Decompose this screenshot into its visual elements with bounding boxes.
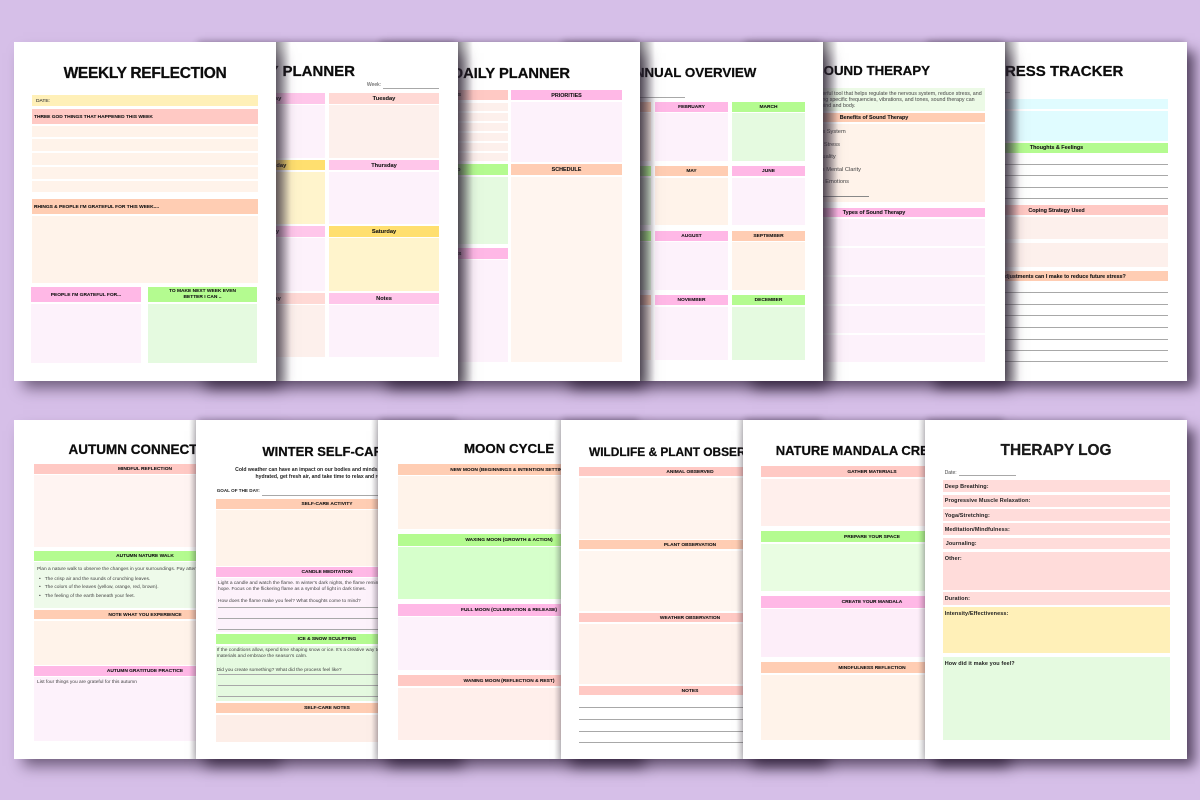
cyan panel [945,111,1168,141]
heading: weather observation: WEATHER OBSERVATION [660,616,720,621]
heading: september: SEPTEMBER [753,234,784,239]
field: intensity: Intensity/Effectiveness: [945,610,1009,616]
heading: may [655,166,728,176]
panel: gather materials [761,479,983,526]
heading: prepare your space [761,531,983,542]
heading: schedule: SCHEDULE [552,167,581,173]
field: yoga: Yoga/Stretching: [945,512,990,518]
panel: september [732,242,805,290]
heading: mindful reflection: MINDFUL REFLECTION [118,467,172,472]
ice text 1: If the conditions allow, spend time shaping snow or ice. It's a creative way to connect with natural [217,648,424,653]
heading: november: NOVEMBER [678,298,706,303]
heading: january [578,102,651,112]
field: other: Other: [945,556,962,562]
heading: notes: NOTES [682,689,698,694]
field: progressive muscle relaxation: Progressive Muscle Relaxation: [945,498,1031,504]
candle lines [218,607,378,630]
heading: april: APRIL [607,169,622,174]
heading: saturday: Saturday [372,229,396,235]
date field [32,95,258,106]
panel: december [732,307,805,360]
heading: monday: Monday [260,96,281,102]
heading: grateful things [32,199,258,214]
heading: february [655,102,728,112]
writing lines: adjustments [1005,292,1168,362]
panel: waxing moon [398,547,620,599]
heading: benefits: Benefits of Sound Therapy [840,115,908,121]
benefit 1: Calms the Nervous System [777,129,846,135]
heading: notes [579,686,801,695]
task row 2 [398,113,508,121]
heading: saturday [329,226,439,237]
heading: create your mandala [761,596,983,608]
heading: waxing moon: WAXING MOON (GROWTH & ACTION) [465,538,553,543]
benefit 2: Reduces Stress [800,142,840,148]
heading: new moon [398,464,620,475]
heading: next week [148,287,257,302]
heading: wednesday: Wednesday [255,163,286,169]
heading: thoughts: Thoughts & Feelings [1030,145,1083,151]
heading: mindfulness reflection: MINDFULNESS REFLECTION [838,666,906,671]
heading: next week: TO MAKE NEXT WEEK EVEN BETTER I CAN .. [169,288,236,300]
heading: nature walk [34,551,256,561]
type row 5 [763,335,985,362]
panel: friday [216,238,325,291]
heading: friday: Friday [262,229,279,235]
row 2 [32,139,258,150]
page: annual overview [560,37,840,400]
page: nature mandala creation [737,415,1018,778]
coping row 1 [945,217,1168,239]
field: journaling: Journaling: [946,541,977,547]
heading: sunday: Sunday [260,296,281,302]
heading: ice and snow: ICE & SNOW SCULPTING [298,637,356,642]
panel: weather observation [579,624,801,684]
benefit line [770,196,869,197]
intro panel [763,88,985,111]
field: journaling [943,538,1170,549]
panel: schedule [511,177,622,362]
heading: self-care notes [216,703,438,713]
heading: schedule [511,164,622,175]
panel: ice and snow [216,646,438,701]
heading: may: MAY [686,169,697,174]
panel: thursday [329,172,439,224]
title: AUTUMN CONNECTION [68,442,222,456]
panel: march [732,113,805,161]
heading: three good things: THREE GOD THINGS THAT HAPPENED THIS WEEK [34,115,153,120]
heading: full moon: FULL MOON (CULMINATION & RELEASE) [461,608,557,613]
field: deep breathing: Deep Breathing: [945,484,989,490]
heading: mindful reflection [34,464,256,474]
bullet list: • [39,585,41,590]
heading: plant observation [579,540,801,549]
row 5 [32,181,258,192]
page: winter self-care [190,415,470,778]
panel: june [732,178,805,225]
heading: waning moon: WANING MOON (REFLECTION & REST) [464,679,554,684]
panel: people [31,304,141,363]
heading: tuesday: Tuesday [373,96,395,102]
title: WILDLIFE & PLANT OBSERVATION [589,444,788,458]
ice question: Did you create something? What did the process feel like? [217,668,342,673]
bullet list: • [39,577,41,582]
task row 4 [398,133,508,141]
heading: adjustments [945,271,1168,281]
benefit 3: Improves Sleep Quality [777,154,836,160]
task row 6 [398,153,508,161]
panel: priorities [511,102,622,162]
panel: full moon [398,617,620,670]
heading: candle meditation: CANDLE MEDITATION [302,570,352,575]
panel: new moon [398,476,620,529]
panel: notes [398,260,508,362]
heading: notes: NOTES [445,252,461,257]
heading: note what you experience: NOTE WHAT YOU EXPERIENCE [108,613,182,618]
date line [947,92,1010,93]
bullet list: The feeling of the earth beneath your feet. [45,594,135,599]
panel: waning moon [398,688,620,740]
intro line 1: Cold weather can have an impact on our bodies and minds. Stay warm, stay [235,467,419,473]
title: MOON CYCLE [464,441,554,456]
panel: november [655,307,728,360]
heading: ice and snow [216,634,438,644]
row 3 [32,153,258,164]
walk text: Plan a nature walk to observe the changes in your surroundings. Pay attention to: [37,567,211,572]
panel: monday [216,105,325,158]
field: meditation: Meditation/Mindfulness: [945,527,1010,533]
field: intensity [943,607,1170,653]
heading: adjustments: What adjustments can I make to reduce future stress? [987,274,1126,280]
title: ANNUAL OVERVIEW [625,64,756,80]
panel: saturday [329,238,439,291]
heading: july [578,231,651,241]
title: WEEKLY PLANNER [216,62,355,80]
task row 3 [398,123,508,131]
row 4 [32,167,258,178]
heading: december [732,295,805,305]
candle text 1: Light a candle and watch the flame. In winter's dark nights, the flame reminds us of warmth and [218,581,422,586]
heading: priorities [511,90,622,100]
field: feeling [943,657,1170,740]
cyan bar [945,99,1168,109]
heading: prepare your space: PREPARE YOUR SPACE [844,535,900,540]
heading: weather observation [579,613,801,622]
title: NATURE MANDALA CREATION [776,442,968,458]
heading: people [31,287,141,302]
heading: june: JUNE [762,169,775,174]
heading: friday [216,226,325,237]
bullet list: • [39,594,41,599]
candle text 2: hope. Focus on the flickering flame as a symbol of light in dark times. [218,587,366,592]
heading: mood: MOOD [445,168,461,173]
page: wildlife and plant observation [555,415,836,778]
page: daily planner [378,37,657,400]
title: THERAPY LOG [1001,442,1111,458]
panel: candle meditation [216,578,438,632]
ice text 2: materials and embrace the season's calm. [217,654,307,659]
panel: animal observed [579,478,801,539]
heading: people: PEOPLE I'M GRATEFUL FOR... [51,293,121,298]
heading: gratitude practice: AUTUMN GRATITUDE PRACTICE [107,669,183,674]
panel: gratitude practice [34,677,256,741]
type row 1 [763,219,985,246]
field: meditation [943,523,1170,535]
date line [959,474,1016,476]
panel: mood [398,177,508,244]
bullet list: The colors of the leaves (yellow, orange, red, brown). [45,585,159,590]
heading: priorities: PRIORITIES [551,93,582,99]
heading: thoughts [945,143,1168,153]
panel: prepare your space [761,544,983,591]
heading: mindfulness reflection [761,662,983,673]
bullet list [39,576,159,599]
heading: create your mandala: CREATE YOUR MANDALA [842,600,902,605]
page: weekly planner [196,37,475,400]
panel: experience [34,621,256,665]
panel: next week [148,304,257,363]
heading: january: JANUARY [603,105,626,110]
heading: august: AUGUST [681,234,702,239]
heading: full moon [398,604,620,616]
heading: july: JULY [609,234,620,239]
page: weekly reflection [12,42,292,399]
title: STRESS TRACKER [986,62,1123,80]
heading: types: Types of Sound Therapy [843,210,905,216]
heading: monday [216,93,325,104]
heading: self-care activity: SELF-CARE ACTIVITY [302,502,352,507]
week label: Week: [367,82,381,88]
title: WEEKLY REFLECTION [64,65,226,82]
panel: february [655,113,728,161]
panel: mindfulness reflection [761,675,983,740]
field: progressive muscle relaxation [943,495,1170,507]
heading: december: DECEMBER [755,298,782,303]
field: other [943,552,1170,590]
type row 3 [763,277,985,304]
goal line [262,495,438,496]
panel: january [578,113,651,161]
coping row 2 [945,243,1168,267]
heading: self-care notes: SELF-CARE NOTES [304,706,350,711]
field: duration [943,592,1170,605]
panel: october [578,307,651,360]
intro line 3: restore balance to the mind and body. [767,103,856,109]
heading: february: FEBRUARY [678,105,705,110]
panel: mindful reflection [34,475,256,547]
heading: gather materials [761,466,983,477]
heading: animal observed [579,467,801,476]
page: autumn connection [12,420,287,777]
intro line 2: hydrated, get fresh air, and take time to relax and recharge. [256,474,398,480]
field: deep breathing [943,480,1170,492]
panel: july [578,242,651,290]
heading: three good things [32,109,258,124]
heading: gratitude practice [34,666,256,676]
heading: grateful things: RHINGS & PEOPLE I'M GRATEFUL FOR THIS WEEK.... [34,205,159,210]
heading: thursday: Thursday [371,163,397,169]
candle question: How does the flame make you feel? What thoughts come to mind? [218,599,361,604]
heading: types [763,208,985,217]
heading: new moon: NEW MOON (BEGINNINGS & INTENTION SETTING) [450,468,568,473]
type row 4 [763,306,985,333]
date label: Date: [945,470,957,476]
heading: waxing moon [398,534,620,546]
title: WINTER SELF-CARE [262,444,392,458]
heading: nature walk: AUTUMN NATURE WALK [116,554,174,559]
panel: nature walk [34,562,256,608]
heading: tasks: TASKS [445,93,461,98]
heading: plant observation: PLANT OBSERVATION [664,543,716,548]
panel: grateful things [32,216,258,283]
title: SOUND THERAPY [815,62,930,78]
page: sound therapy [742,37,1022,400]
heading: september [732,231,805,241]
writing lines: notes [579,707,743,743]
heading: march: MARCH [759,105,778,110]
heading: mood [398,164,508,175]
heading: august [655,231,728,241]
heading: march [732,102,805,112]
panel: tuesday [329,105,439,158]
page: moon cycle [372,415,652,778]
date field: DATE: [36,99,50,104]
panel: may [655,178,728,225]
heading: notes [398,248,508,259]
heading: wednesday [216,160,325,170]
heading: self-care activity [216,499,438,509]
intro line 2: promote healing. By using specific frequencies, vibrations, and tones, sound therapy can [767,97,975,103]
type row 2 [763,248,985,275]
row 1 [32,126,258,137]
heading: october: OCTOBER [602,298,627,303]
heading: candle meditation [216,567,438,577]
panel: august [655,242,728,290]
heading: coping: Coping Strategy Used [1028,208,1085,214]
heading: coping [945,205,1168,215]
panel: plant observation [579,551,801,611]
field: feeling: How did it make you feel? [945,661,1015,667]
page: stress tracker [925,37,1200,398]
task row 1 [398,103,508,111]
title: DAILY PLANNER [452,66,570,82]
ice lines [218,674,378,697]
heading: thursday [329,160,439,170]
field: yoga [943,509,1170,521]
panel: april [578,178,651,225]
panel: wednesday [216,172,325,224]
panel: create your mandala [761,609,983,657]
heading: note what you experience [34,610,256,619]
writing lines: thoughts [1005,164,1168,199]
heading: november [655,295,728,305]
heading: gather materials: GATHER MATERIALS [847,470,897,475]
panel: sunday [216,305,325,357]
page: therapy log [919,415,1200,776]
heading: benefits [763,113,985,122]
year line [585,96,685,98]
field: duration: Duration: [945,596,970,602]
bullet list: The crisp air and the sounds of crunching leaves. [45,577,150,582]
heading: animal observed: ANIMAL OBSERVED [666,470,714,475]
heading: waning moon [398,675,620,686]
benefit 5: Balances Emotions [800,179,849,185]
heading: october [578,295,651,305]
panel: benefits [763,124,985,202]
heading: notes [329,293,439,304]
heading: june [732,166,805,176]
panel: self-care activity [216,510,438,566]
panel: notes [329,305,439,357]
heading: april [578,166,651,176]
heading: tuesday [329,93,439,104]
benefit 4: Enhances Mental Clarity [799,167,861,173]
task row 5 [398,143,508,151]
heading: notes: Notes [376,296,392,302]
heading: tasks [398,90,508,100]
gratitude text: List four things you are grateful for this autumn [37,680,137,685]
intro line 1: Sound therapy is a powerful tool that helps regulate the nervous system, reduce stress, and [767,91,982,97]
panel: self-care notes [216,715,438,742]
week line [383,88,439,89]
goal label: GOAL OF THE DAY: [217,488,260,493]
heading: sunday [216,293,325,304]
